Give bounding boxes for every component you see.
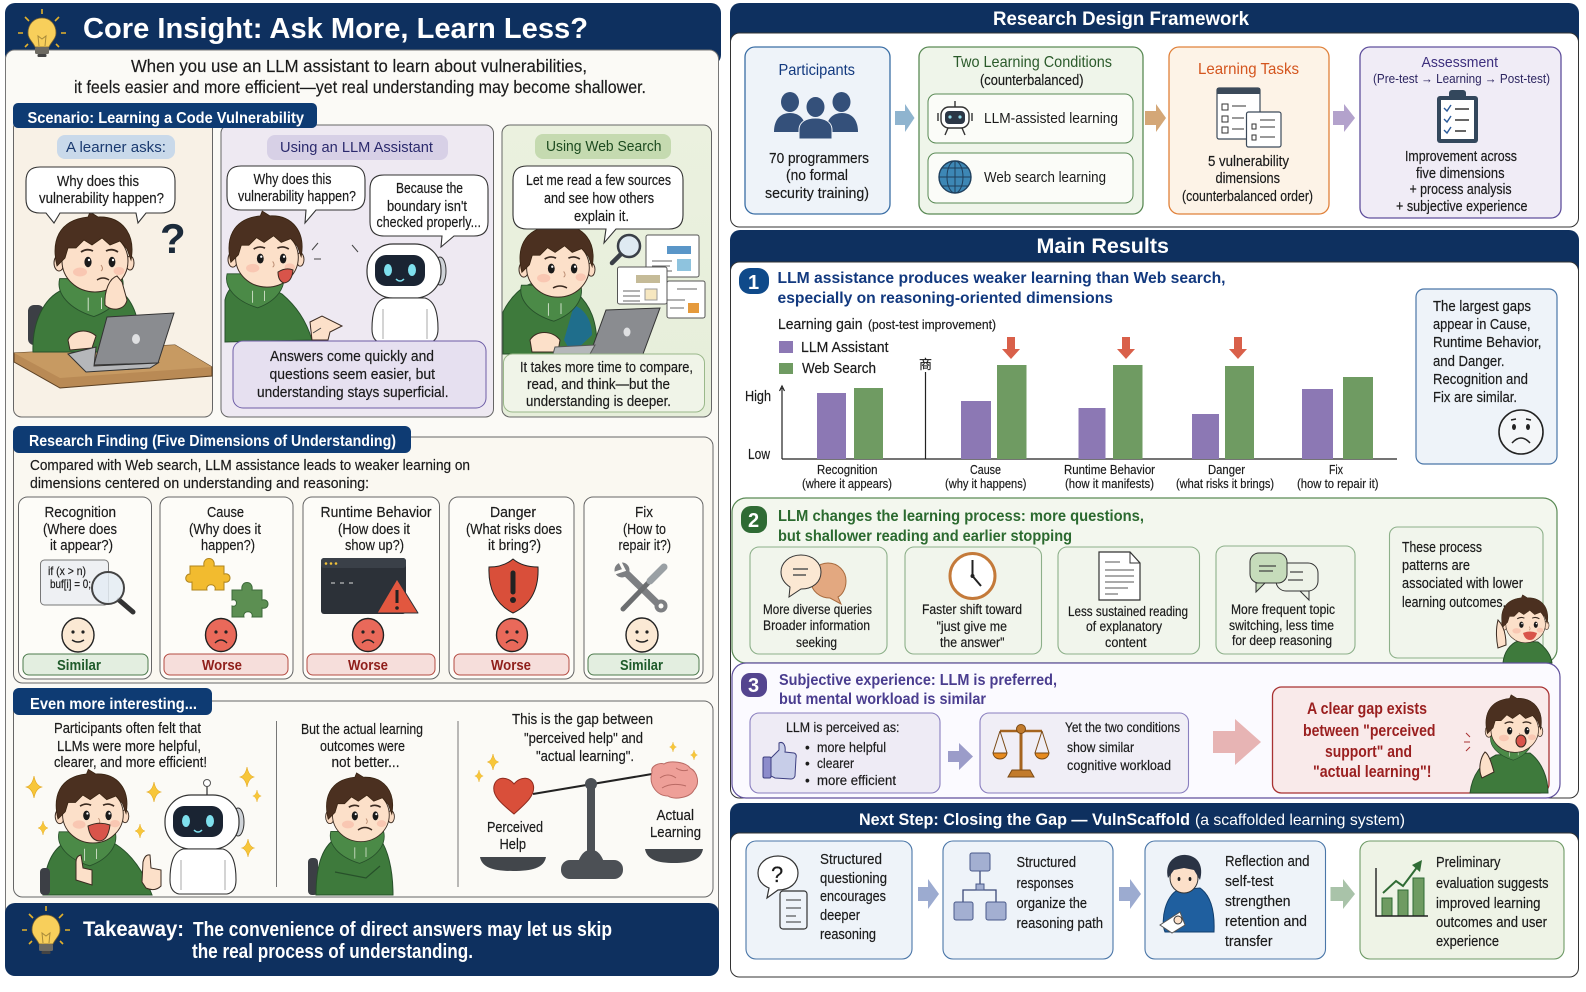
title: Core Insight: Ask More, Learn Less? (83, 13, 588, 45)
card: structured responses: Structured (1016, 855, 1076, 871)
illustration: learner writing (1160, 855, 1214, 933)
icon: sad face (1499, 410, 1543, 454)
header bar: core insight (5, 3, 721, 65)
speech bubble: web search: and see how others (544, 191, 654, 207)
callout: largest gaps: The largest gaps (1433, 299, 1531, 315)
result 2 heading (778, 508, 1144, 545)
note: LLM outcome: understanding stays superficial. (257, 385, 448, 401)
card: cause (160, 497, 293, 679)
card: learning tasks: 5 vulnerability (1208, 154, 1290, 170)
icon: document (1099, 552, 1140, 600)
heading: (a scaffolded learning system) (1195, 812, 1405, 829)
card: diverse queries: Broader information (763, 618, 870, 633)
icon: clipboard (1437, 90, 1478, 143)
badge: worse (454, 654, 569, 675)
card: less sustained reading: Less sustained reading (1068, 604, 1188, 619)
badge: worse: Worse (348, 657, 388, 674)
scene: using web search (502, 125, 712, 417)
card: structured questioning: Structured (820, 852, 882, 868)
card: preliminary evaluation: Preliminary (1436, 855, 1501, 871)
badge: similar: Similar (620, 657, 663, 674)
callout: largest gaps: Recognition and (1433, 372, 1528, 388)
callout: process patterns: These process (1402, 540, 1482, 556)
bar chart: learning gain: Low (748, 447, 770, 463)
speech bubble: web search (513, 166, 683, 243)
card: assessment: Assessment (1422, 54, 1499, 71)
card: structured questioning: encourages (820, 889, 886, 905)
label: perceived help: Perceived (487, 820, 543, 836)
callout: largest gaps (1416, 289, 1557, 464)
arrow: to the gap (1213, 719, 1261, 765)
text: perceived: clearer, and more efficient! (54, 755, 207, 771)
panel: main results (730, 230, 1579, 798)
takeaway banner (5, 903, 719, 976)
speech bubble: robot answer: boundary isn't (387, 199, 467, 215)
badge: worse (164, 654, 288, 675)
card: cause: happen?) (201, 538, 255, 554)
option: web search learning (928, 153, 1133, 203)
card: similar workload: cognitive workload (1067, 758, 1171, 773)
card: recognition: (Where does (43, 522, 117, 538)
speech bubble: question (26, 167, 175, 223)
text: actual outcomes: But the actual learning (301, 722, 423, 738)
card: faster shift: the answer" (940, 635, 1005, 650)
face: worse (496, 618, 528, 652)
card: participants: (no formal (786, 168, 848, 184)
subtitle: When you use an LLM assistant to learn about vulnerabilities, (131, 56, 587, 76)
pill: using an LLM assistant (267, 135, 448, 160)
callout: clear gap: A clear gap exists (1307, 699, 1427, 718)
result 2 heading: LLM changes the learning process: more questions, (778, 508, 1144, 525)
badge 1: 1 (748, 272, 759, 294)
speech bubble: robot answer: Because the (396, 181, 463, 197)
text: perceived: LLMs were more helpful, (57, 739, 201, 755)
icon: question mark: ? (160, 215, 186, 262)
badge 1 (739, 268, 769, 294)
left content background (6, 50, 718, 950)
icon: clock (950, 554, 995, 598)
card: assessment: Improvement across (1405, 149, 1517, 165)
card: faster shift (905, 547, 1042, 654)
heading (859, 810, 1405, 829)
speech bubble: question: vulnerability happen? (39, 191, 164, 207)
icon: question bubble and document (758, 856, 807, 929)
axis labels: Runtime Behavior (1064, 462, 1156, 477)
card: two learning conditions: (counterbalanced) (980, 73, 1084, 89)
card: reflection and self-test: Reflection and (1225, 854, 1310, 870)
card: faster shift: Faster shift toward (922, 602, 1022, 617)
section tab: even more interesting (13, 688, 212, 715)
card: less sustained reading (1058, 547, 1200, 654)
icon: thumbs up (763, 742, 796, 779)
section tab: research finding (13, 426, 411, 453)
card: reflection and self-test: self-test (1225, 874, 1274, 890)
icon: light bulb (22, 906, 70, 954)
callout: process patterns: learning outcomes. (1402, 595, 1506, 611)
arrow (918, 879, 939, 909)
card: learning tasks (1169, 47, 1329, 214)
card: cause: (Why does it (189, 522, 261, 538)
axis labels: Cause (970, 462, 1001, 477)
result 3 heading: but mental workload is similar (779, 691, 986, 708)
card: danger: (What risks does (466, 522, 562, 538)
icon: code with magnifier: buf[i] = 0; (50, 577, 91, 591)
icon: puzzle pieces (186, 558, 268, 617)
card: structured questioning: deeper (820, 908, 860, 924)
label: perceived help: Help (500, 837, 526, 853)
arrow (1330, 879, 1355, 909)
finding intro: Compared with Web search, LLM assistance leads to weaker learning on (30, 458, 470, 474)
speech bubble: question: Why does this (57, 174, 139, 190)
icon: task sheets (1217, 88, 1281, 147)
card: similar workload (980, 713, 1188, 793)
card: runtime behavior: Runtime Behavior (320, 504, 432, 521)
panel: next step (730, 803, 1579, 977)
text: actual outcomes (301, 722, 423, 771)
callout: largest gaps: appear in Cause, (1433, 317, 1530, 333)
card: LLM perception (750, 713, 940, 793)
panel: research design framework (730, 3, 1579, 227)
card: recognition: it appear?) (50, 538, 113, 554)
result 2 (732, 498, 1557, 663)
callout: largest gaps: Runtime Behavior, (1433, 335, 1542, 351)
icon: shield (489, 559, 538, 613)
label: actual learning: Actual (656, 808, 694, 824)
card: runtime behavior: show up?) (345, 538, 404, 554)
face: similar (62, 618, 94, 652)
icon: rising chart (1376, 860, 1428, 916)
illustration: thinking learner (1496, 595, 1552, 663)
badge 3 (741, 673, 767, 697)
card: participants: security training) (765, 186, 869, 202)
card: fix: Fix (635, 504, 653, 521)
text: the gap: This is the gap between (512, 712, 653, 728)
chart title and legend: Learning gain (778, 317, 862, 333)
card: participants (745, 47, 890, 214)
panel: research finding (13, 426, 713, 683)
pill: using web search: Using Web Search (546, 138, 662, 155)
callout: process patterns (1390, 527, 1543, 658)
icon: code with magnifier: if (x > n) (48, 564, 86, 578)
card: LLM perception: • (805, 773, 810, 788)
face: similar (626, 618, 658, 652)
axis labels: Danger (1208, 462, 1246, 477)
illustration: learner at desk (14, 212, 212, 388)
speech bubble: robot answer (370, 175, 488, 247)
callout: clear gap: between "perceived (1303, 721, 1436, 740)
speech bubble: learner question (227, 166, 365, 223)
icon: code with magnifier (40, 560, 133, 612)
text: actual outcomes: outcomes were (320, 739, 405, 755)
card: similar workload: Yet the two conditions (1065, 720, 1180, 735)
takeaway text: Takeaway: (83, 918, 184, 941)
icon: chat bubbles (1250, 553, 1318, 600)
icon: balance scale (993, 724, 1049, 777)
note: web search outcome: read, and think—but the (527, 377, 670, 393)
heading: Research Design Framework (993, 9, 1249, 30)
note: web search outcome (504, 354, 704, 412)
card: reflection and self-test (1145, 841, 1326, 959)
note: web search outcome: It takes more time to compare, (520, 360, 693, 376)
card: reflection and self-test: strengthen (1225, 894, 1290, 910)
axis labels: Fix (1329, 462, 1343, 477)
card: assessment: + process analysis (1410, 182, 1512, 198)
card: topic switching (1216, 546, 1355, 654)
chart title and legend (778, 317, 996, 377)
takeaway text (83, 918, 612, 963)
card: learning tasks: dimensions (1216, 171, 1280, 187)
card: reflection and self-test: transfer (1225, 934, 1273, 950)
illustration: balance of help and learning (475, 742, 703, 879)
bar chart: learning gain: High (745, 389, 771, 405)
illustration: disappointed learner (308, 773, 394, 895)
chart title and legend: Web Search (802, 361, 876, 377)
arrow (1145, 104, 1166, 132)
panel: core insight (5, 3, 721, 950)
card: danger: Danger (490, 504, 536, 521)
speech bubble: robot answer: checked properly... (376, 215, 481, 231)
sparkles (26, 767, 261, 857)
arrow (1333, 104, 1355, 132)
panel: even more interesting (13, 688, 713, 897)
section tab: even more interesting: Even more interesting... (30, 696, 197, 713)
text: the gap: "perceived help" and (524, 731, 643, 747)
card: structured responses: responses (1016, 876, 1074, 892)
section tab: research finding: Research Finding (Five Dimensions of Understanding) (29, 433, 396, 450)
card: structured questioning: reasoning (820, 927, 876, 943)
chart title and legend: LLM Assistant (801, 340, 888, 356)
panel: scenario (13, 103, 712, 417)
card: preliminary evaluation: experience (1436, 934, 1499, 950)
label: perceived help (487, 820, 543, 853)
card: LLM perception: more efficient (817, 773, 896, 788)
badge: worse: Worse (491, 657, 531, 674)
card: diverse queries (750, 547, 887, 654)
card: assessment: + subjective experience (1396, 199, 1528, 215)
subtitle: it feels easier and more efficient—yet real understanding may become shallower. (74, 77, 646, 97)
card: reflection and self-test: retention and (1225, 914, 1307, 930)
icon: wrench and screwdriver (614, 560, 668, 612)
bar chart: learning gain: 商 (919, 357, 932, 372)
callout: clear gap (1272, 687, 1549, 793)
callout: clear gap: support" and (1325, 742, 1412, 761)
card: fix (584, 497, 703, 679)
label: actual learning: Learning (650, 825, 701, 841)
text: perceived (54, 721, 207, 771)
face: worse (206, 618, 236, 652)
pill: a learner asks: A learner asks: (66, 139, 166, 156)
card: runtime behavior: (How does it (338, 522, 410, 538)
note: LLM outcome (233, 341, 486, 408)
card: two learning conditions: Two Learning Conditions (953, 54, 1112, 71)
card: structured responses: organize the (1016, 896, 1087, 912)
card: recognition (18, 497, 152, 679)
axis labels: (why it happens) (945, 476, 1026, 491)
card: LLM perception: more helpful (817, 740, 886, 755)
callout: largest gaps: and Danger. (1433, 354, 1504, 370)
card: learning tasks: Learning Tasks (1198, 61, 1299, 78)
card: structured responses: reasoning path (1016, 916, 1103, 932)
result 1 (739, 268, 1557, 491)
speech bubble: web search: explain it. (574, 209, 629, 225)
card: recognition: Recognition (44, 504, 116, 521)
speech bubble: learner question: vulnerability happen? (238, 189, 356, 205)
card: structured questioning (746, 841, 912, 959)
finding intro (30, 458, 470, 492)
text: the gap (512, 712, 653, 765)
scene: learner asks (14, 120, 212, 417)
card: structured responses (943, 841, 1113, 959)
card: cause: Cause (207, 504, 244, 521)
icon: light bulb (18, 9, 66, 57)
card: assessment (1360, 47, 1561, 218)
arrow (1119, 879, 1141, 909)
result 1 heading (778, 270, 1226, 307)
speech bubble: web search: Let me read a few sources (526, 173, 671, 189)
callout: clear gap: "actual learning"! (1313, 762, 1432, 781)
result 3 heading: Subjective experience: LLM is preferred, (779, 672, 1057, 689)
bars (817, 365, 1373, 459)
card: learning tasks: (counterbalanced order) (1182, 189, 1313, 205)
result 2 heading: but shallower reading and earlier stopping (778, 528, 1072, 545)
section tab: scenario (13, 103, 317, 128)
card: LLM perception: LLM is perceived as: (786, 720, 900, 735)
badge 3: 3 (748, 675, 759, 697)
callout: process patterns: associated with lower (1402, 576, 1523, 592)
axis labels: (where it appears) (802, 476, 892, 491)
text: the gap: "actual learning". (536, 749, 634, 765)
option: LLM-assisted learning: LLM-assisted learning (984, 110, 1118, 127)
card: diverse queries: More diverse queries (763, 602, 872, 617)
card: less sustained reading: content (1105, 635, 1147, 650)
icon: people (774, 92, 858, 139)
axis labels: (how it manifests) (1065, 476, 1154, 491)
axis labels (802, 462, 1378, 491)
card: LLM perception: clearer (817, 756, 854, 771)
bar chart: learning gain (745, 317, 1397, 491)
badge 2: 2 (748, 510, 759, 532)
note: LLM outcome: questions seem easier, but (270, 367, 435, 383)
pill: a learner asks (57, 135, 175, 159)
card: topic switching: for deep reasoning (1232, 633, 1332, 648)
badge: worse (307, 654, 435, 675)
pill: using an LLM assistant: Using an LLM Assistant (280, 139, 434, 156)
arrow (895, 104, 914, 132)
result 3 heading (779, 672, 1057, 708)
badge: similar: Similar (57, 657, 101, 674)
card: danger: it bring?) (488, 538, 541, 554)
icon: question bubble and document: ? (771, 862, 783, 887)
axis labels: (how to repair it) (1297, 476, 1378, 491)
pill: using web search (535, 134, 671, 159)
takeaway text: The convenience of direct answers may let us skip (193, 919, 612, 941)
badge: similar (23, 654, 148, 675)
option: LLM-assisted learning (928, 94, 1133, 143)
axis labels: (what risks it brings) (1176, 476, 1274, 491)
card: fix: (How to (623, 522, 666, 538)
text: actual outcomes: not better... (332, 755, 400, 771)
callout: largest gaps: Fix are similar. (1433, 390, 1517, 406)
speech bubble: learner question: Why does this (254, 172, 332, 188)
card: topic switching: switching, less time (1229, 618, 1334, 633)
card: participants: Participants (778, 62, 855, 79)
badge: similar (588, 654, 699, 675)
card: preliminary evaluation: evaluation suggests (1436, 876, 1548, 892)
card: preliminary evaluation: improved learning (1436, 896, 1540, 912)
card: runtime behavior (303, 497, 440, 679)
badge 2 (741, 506, 767, 533)
chart title and legend: (post-test improvement) (868, 317, 996, 332)
card: structured questioning: questioning (820, 871, 887, 887)
icon: magnifier and source pages (612, 235, 705, 318)
result 3 (732, 663, 1560, 798)
text: perceived: Participants often felt that (54, 721, 201, 737)
card: participants: 70 programmers (769, 151, 869, 167)
illustration: learner and robot (225, 211, 446, 343)
option: web search learning: Web search learning (984, 169, 1106, 186)
subtitle (74, 56, 646, 97)
result 1 heading: especially on reasoning-oriented dimensions (778, 290, 1113, 307)
axis labels: Recognition (817, 462, 878, 477)
card: faster shift: "just give me (936, 619, 1007, 634)
illustration: learner reading sources (503, 221, 660, 354)
card: LLM perception: • (805, 756, 810, 771)
finding intro: dimensions centered on understanding and reasoning: (30, 476, 369, 492)
icon: chat bubbles (781, 555, 846, 604)
face: worse (352, 618, 384, 652)
card: two learning conditions (919, 47, 1143, 214)
section tab: scenario: Scenario: Learning a Code Vulnerability (28, 110, 304, 127)
arrows: largest gaps (1002, 337, 1247, 359)
icon: flow diagram (954, 853, 1006, 920)
illustration: happy learner and robot (40, 769, 244, 895)
scene: using LLM (221, 125, 494, 417)
card: assessment: (Pre-test → Learning → Post-test) (1373, 71, 1550, 86)
card: fix: repair it?) (618, 538, 671, 554)
result 1 heading: LLM assistance produces weaker learning than Web search, (778, 270, 1226, 287)
callout: process patterns: patterns are (1402, 558, 1470, 574)
note: LLM outcome: Answers come quickly and (270, 349, 434, 365)
card: less sustained reading: of explanatory (1086, 619, 1162, 634)
note: web search outcome: understanding is deeper. (526, 394, 671, 410)
icon: terminal with warning (321, 558, 418, 614)
label: actual learning (650, 808, 701, 841)
card: assessment: five dimensions (1416, 166, 1504, 182)
takeaway text: the real process of understanding. (192, 941, 473, 963)
heading: Next Step: Closing the Gap — VulnScaffold (859, 810, 1190, 829)
badge: worse: Worse (202, 657, 242, 674)
card: diverse queries: seeking (796, 635, 837, 650)
card: topic switching: More frequent topic (1231, 602, 1335, 617)
card: LLM perception: • (805, 740, 810, 755)
illustration: surprised learner (1464, 695, 1548, 793)
arrow (948, 743, 973, 770)
card: preliminary evaluation: outcomes and user (1436, 915, 1547, 931)
card: danger (449, 497, 574, 679)
card: similar workload: show similar (1067, 740, 1134, 755)
card: preliminary evaluation (1360, 841, 1564, 959)
heading: Main Results (1036, 235, 1169, 258)
